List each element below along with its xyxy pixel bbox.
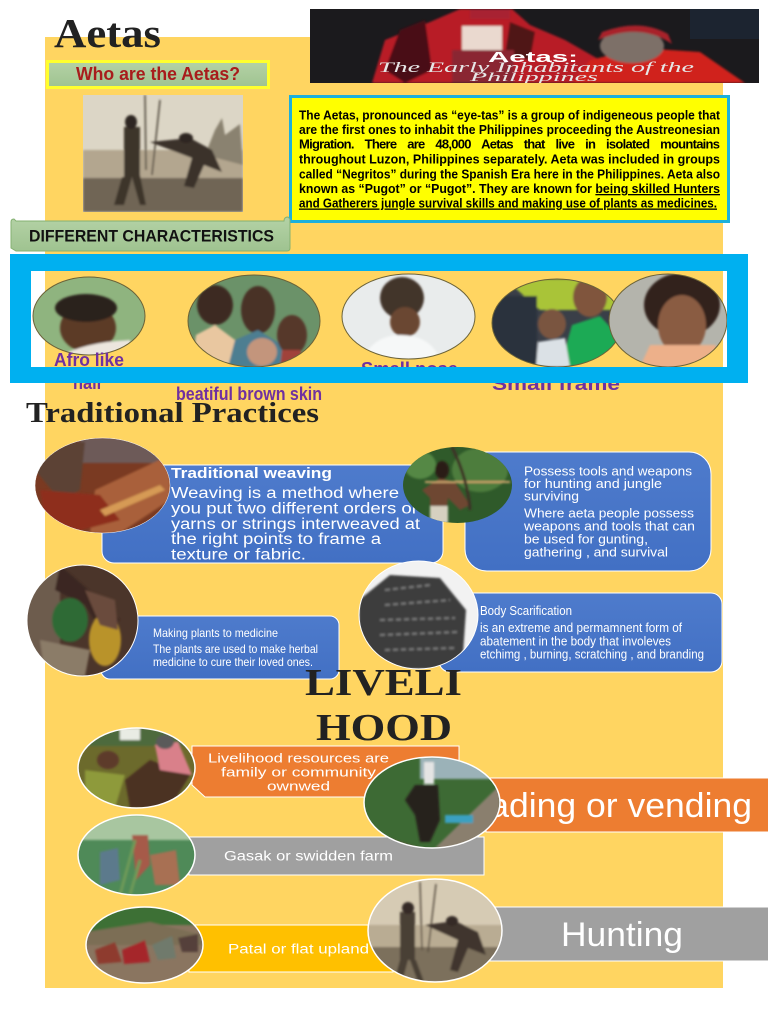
panel: plants to medicine: Making plants to medicine bbox=[153, 626, 278, 640]
panel: tools and weapons: for hunting and jungle bbox=[524, 476, 662, 491]
panel: body scarification: Body Scarification bbox=[480, 604, 572, 618]
panel: traditional weaving: Weaving is a method where bbox=[171, 485, 399, 502]
label: afro like hair: hair bbox=[73, 373, 103, 393]
panel: tools and weapons: Where aeta people possess bbox=[524, 506, 695, 520]
banner image bbox=[310, 9, 759, 84]
text box: who are the Aetas: and Gatherers jungle survival skills and making use of plants as medicines. bbox=[299, 196, 717, 210]
text box: who are the Aetas: called “Negritos” during the Spanish Era here in the Philippines. Aeta also bbox=[299, 166, 720, 182]
photo: two Aeta hunters bbox=[83, 95, 243, 212]
banner: gasak or swidden farm bbox=[189, 837, 484, 875]
panel: body scarification bbox=[439, 593, 722, 672]
photo: water buffalo bbox=[364, 757, 500, 848]
photo: small frame mother and child bbox=[492, 277, 622, 367]
heading: traditional practices: Traditional Practices bbox=[26, 397, 319, 429]
banner: gasak or swidden farm: Gasak or swidden farm bbox=[224, 848, 393, 864]
photo: farming bbox=[78, 728, 195, 808]
banner: patal or flat upland: Patal or flat upland bbox=[228, 942, 369, 956]
heading box: Who are the Aetas? bbox=[48, 62, 268, 88]
panel: tools and weapons: Possess tools and weapons bbox=[524, 464, 693, 478]
panel: plants to medicine bbox=[101, 616, 339, 679]
panel: body scarification: is an extreme and permamnent form of bbox=[480, 621, 682, 635]
heading: livelihood bbox=[305, 662, 462, 749]
panel: tools and weapons: weapons and tools that can bbox=[523, 518, 695, 534]
panel: traditional weaving bbox=[102, 465, 443, 564]
panel: traditional weaving: you put two different orders or bbox=[171, 500, 418, 518]
panel: tools and weapons: be used for gunting, bbox=[524, 532, 648, 546]
heading: livelihood: HOOD bbox=[316, 707, 452, 749]
banner: livelihood resources bbox=[192, 746, 459, 797]
panel: body scarification: abatement in the body that involeves bbox=[480, 634, 671, 648]
photo: hunter with bow bbox=[403, 447, 512, 523]
banner: patal or flat upland bbox=[189, 925, 393, 972]
text box: who are the Aetas: The Aetas, pronounced as “eye-tas” is a group of indigeneous people that bbox=[299, 108, 721, 122]
panel: traditional weaving: the right points to frame a bbox=[171, 531, 381, 548]
banner caption bbox=[380, 52, 694, 83]
banner caption: The Early Inhabitants of the bbox=[378, 60, 695, 76]
panel: plants to medicine: The plants are used to make herbal bbox=[153, 642, 318, 656]
heading box: different characteristics bbox=[11, 217, 290, 251]
label: afro like hair: Afro like bbox=[54, 350, 124, 370]
label: afro like hair bbox=[54, 350, 124, 393]
photo: swidden farm bbox=[78, 815, 195, 895]
text box: who are the Aetas: Migration. There are 48,000 Aetas that live in isolated mountains bbox=[299, 136, 720, 152]
text box: who are the Aetas: throughout Luzon, Philippines separately. Aeta was included in groups bbox=[299, 152, 720, 166]
panel: tools and weapons bbox=[465, 452, 711, 571]
panel: body scarification: etchimg , burning, scratching , and branding bbox=[480, 648, 704, 662]
banner caption: Aetas: bbox=[488, 49, 578, 66]
photo: afro hair child bbox=[33, 277, 145, 357]
banner: livelihood resources: ownwed bbox=[267, 778, 330, 794]
banner: livelihood resources: Livelihood resources are bbox=[208, 750, 389, 766]
text box: who are the Aetas: are the first ones to inhabit the Philippines proceeding the Austreonesian bbox=[299, 122, 720, 137]
photo: weaving bbox=[35, 438, 170, 533]
text box: who are the Aetas: known as “Pugot” or “Pugot”. They are known for being skilled Hunters bbox=[299, 181, 720, 196]
panel: plants to medicine: medicine to cure their loved ones. bbox=[153, 655, 313, 669]
panel: traditional weaving: yarns or strings interweaved at bbox=[171, 516, 421, 533]
photo: family with brown skin bbox=[188, 275, 320, 367]
panel: tools and weapons: surviving bbox=[524, 488, 579, 504]
text box: who are the Aetas bbox=[290, 96, 728, 222]
heading box: different characteristics: DIFFERENT CHARACTERISTICS bbox=[29, 226, 274, 246]
panel: traditional weaving: texture or fabric. bbox=[171, 546, 306, 564]
photo: body scarification bbox=[359, 561, 478, 669]
heading: livelihood: LIVELI bbox=[305, 662, 462, 704]
photo: flat upland bbox=[86, 907, 203, 983]
banner caption: Philippines bbox=[468, 69, 598, 84]
photo: plants bbox=[27, 565, 138, 676]
label: beautiful brown skin: beatiful brown skin bbox=[176, 384, 322, 404]
heading box: Who are the Aetas?: Who are the Aetas? bbox=[76, 64, 240, 84]
panel: tools and weapons: gathering , and survival bbox=[524, 544, 668, 560]
banner: hunting bbox=[490, 907, 768, 961]
panel: traditional weaving: Traditional weaving bbox=[171, 466, 332, 482]
characteristics blue frame bbox=[10, 254, 748, 383]
banner: hunting: Hunting bbox=[561, 916, 683, 954]
characteristics white strip bbox=[31, 271, 45, 367]
banner: trading or vending bbox=[457, 778, 768, 832]
label: small nose: Small nose bbox=[361, 359, 458, 379]
photo: small nose child bbox=[342, 274, 475, 359]
title: Aetas: Aetas bbox=[54, 10, 161, 56]
banner: trading or vending: Trading or vending bbox=[457, 787, 752, 825]
photo: curly haired girl bbox=[609, 273, 727, 367]
photo: hunters bbox=[368, 879, 502, 982]
banner: livelihood resources: family or community bbox=[221, 764, 377, 780]
label: small frame: Small frame bbox=[492, 374, 620, 394]
